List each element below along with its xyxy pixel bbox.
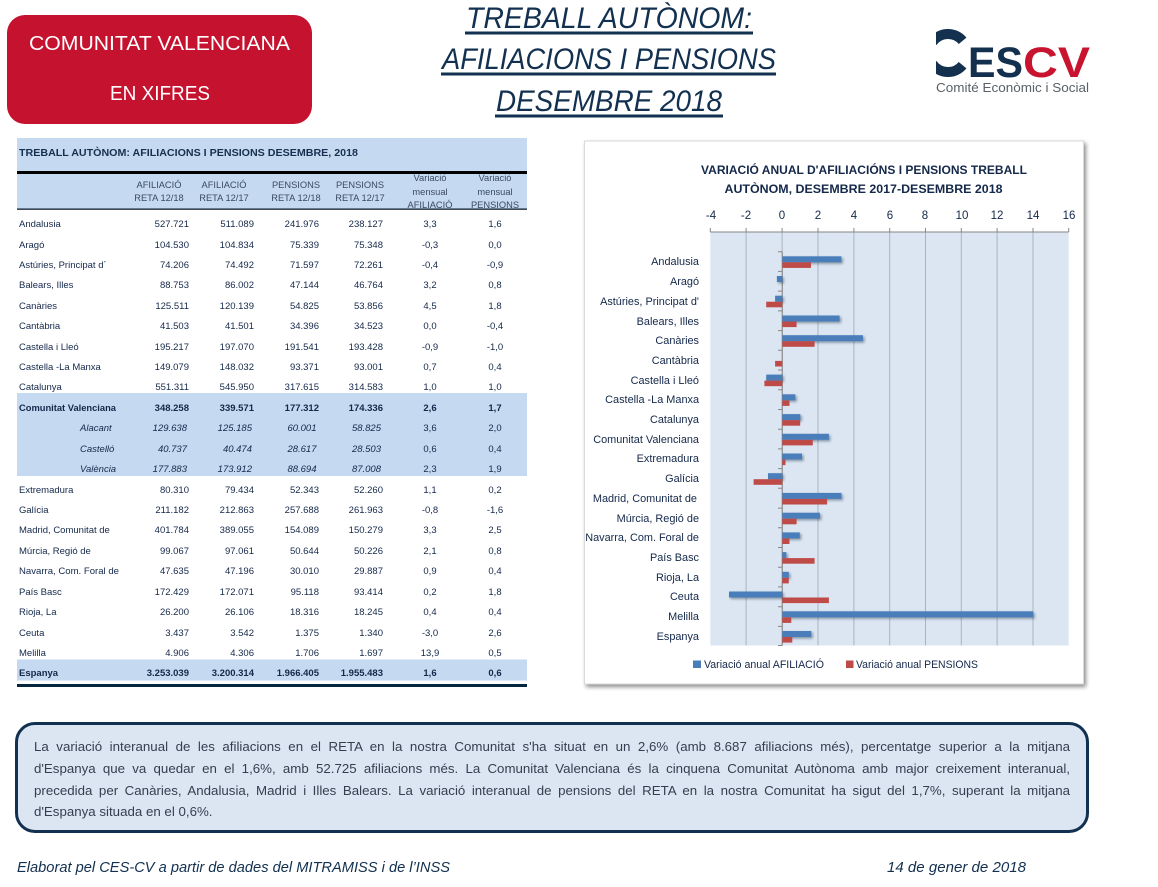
row: Alacant (79, 423, 502, 434)
row: Navarra: 0,9 (423, 566, 437, 577)
row: Balears: 46.764 (354, 280, 383, 291)
row: Ceuta: Ceuta (19, 628, 45, 639)
bars: variació anual afiliació (729, 256, 1033, 637)
row: Alacant: 2,0 (488, 423, 502, 434)
row: Andalusia: 3,3 (423, 219, 437, 230)
category labels: Melilla (668, 611, 700, 623)
row: Aragó: Aragó (19, 240, 44, 251)
row: Castella i Lleó: 197.070 (220, 342, 254, 353)
text box: summary: La variació interanual de les afiliacions en el RETA en la nostra Comunitat s'ha situat en un 2,6% (amb 8.687 afiliacions més), percentatge superior a la mitjana (34, 739, 1070, 754)
row: Melilla: 1.706 (295, 648, 319, 659)
row: Alacant: 129.638 (153, 423, 188, 434)
row: Castella i Lleó: -0,9 (422, 342, 438, 353)
row: Espanya: 1.966.405 (277, 668, 320, 679)
row: Ceuta: -3,0 (422, 628, 438, 639)
row: Múrcia: 0,8 (488, 546, 502, 557)
row: Catalunya: 545.950 (220, 382, 254, 393)
x axis: -4 (706, 210, 717, 222)
row: Espanya: 3.200.314 (212, 668, 255, 679)
row: Melilla: 4.306 (230, 648, 254, 659)
row: Galícia (19, 505, 503, 516)
row: Catalunya: Catalunya (19, 382, 62, 393)
row: Comunitat Valenciana: 177.312 (285, 403, 319, 414)
row: Aragó: 0,0 (488, 240, 502, 251)
row: Castelló (80, 444, 502, 455)
x axis: 16 (1063, 210, 1075, 222)
category labels: Galícia (665, 473, 700, 485)
title (440, 2, 776, 118)
text box: summary (15, 722, 1089, 833)
y axis line and ticks (778, 252, 782, 645)
logo: CES CV: ES (968, 39, 1023, 87)
row: Andalusia: 1,6 (488, 219, 502, 230)
row: Galícia: 261.963 (349, 505, 383, 516)
row: Ceuta: 1.340 (359, 628, 383, 639)
row: Aragó: -0,3 (422, 240, 438, 251)
row: País Basc: 0,2 (423, 587, 437, 598)
row: Castelló: 0,6 (423, 444, 437, 455)
row: Comunitat Valenciana: 174.336 (349, 403, 383, 414)
row: Extremadura: 79.434 (225, 485, 254, 496)
row: Castelló: 0,4 (488, 444, 502, 455)
row: Astúries: -0,9 (487, 260, 503, 271)
row: Espanya: 1.955.483 (341, 668, 383, 679)
row: Rioja: 18.316 (290, 607, 319, 618)
footer: source and date: Elaborat pel CES-CV a partir de dades del MITRAMISS i de l’INSS (17, 859, 450, 876)
x axis: 8 (922, 210, 928, 222)
row: Melilla: 0,5 (488, 648, 502, 659)
row: Astúries: 74.492 (225, 260, 254, 271)
table header: PENSIONS (336, 180, 384, 190)
row: Navarra: 0,4 (488, 566, 502, 577)
row: Múrcia: 99.067 (160, 546, 189, 557)
row: Balears: 0,8 (488, 280, 502, 291)
row: Alacant: 60.001 (287, 423, 316, 434)
row: Melilla: Melilla (19, 648, 47, 659)
row: Castella i Lleó: -1,0 (487, 342, 503, 353)
category labels: Madrid, Comunitat de (593, 493, 697, 505)
row: Castella -La Manxa (19, 362, 502, 373)
text box: summary: d'Espanya que va quedar en el 1,6%, amb 52.725 afiliacions més. La Comunitat Valenciana és la cinquena Comunitat Autònoma amb major creixement interanual, (34, 761, 1070, 776)
data table (17, 138, 527, 687)
row: Rioja: 26.200 (160, 607, 189, 618)
row: Castella -La Manxa: 148.032 (220, 362, 254, 373)
row: Navarra: 47.196 (225, 566, 254, 577)
row: Rioja: 18.245 (354, 607, 383, 618)
row: Canàries: Canàries (19, 301, 57, 312)
row: Alacant: 58.825 (352, 423, 382, 434)
row: Astúries: 72.261 (354, 260, 383, 271)
category labels: Múrcia, Regió de (617, 513, 699, 525)
row: País Basc: 93.414 (354, 587, 383, 598)
row: Canàries: 54.825 (290, 301, 319, 312)
row: Rioja: 0,4 (488, 607, 502, 618)
row: Canàries: 1,8 (488, 301, 502, 312)
table header: RETA 12/18 (271, 193, 321, 203)
row: València: 87.008 (352, 464, 382, 475)
row: Balears: 3,2 (423, 280, 437, 291)
row: País Basc: 95.118 (291, 587, 319, 598)
row: Madrid: 389.055 (220, 525, 254, 536)
table header: AFILIACIÓ (202, 180, 246, 190)
row: València: 173.912 (218, 464, 253, 475)
row: Astúries: 71.597 (290, 260, 319, 271)
x axis: 4 (851, 210, 858, 222)
row: Rioja (19, 607, 502, 618)
chart title: AUTÒNOM, DESEMBRE 2017-DESEMBRE 2018 (724, 181, 1003, 196)
x axis: 14 (1027, 210, 1040, 222)
row: València: València (80, 464, 116, 475)
row: Castella -La Manxa: 0,7 (423, 362, 437, 373)
table header: RETA 12/17 (199, 193, 249, 203)
row: Madrid: 154.089 (285, 525, 319, 536)
row: Canàries (19, 301, 502, 312)
row: Madrid: 150.279 (349, 525, 383, 536)
table header: Variació (414, 173, 446, 183)
table header: RETA 12/17 (335, 193, 385, 203)
row: Castella -La Manxa: 149.079 (155, 362, 189, 373)
row: Astúries (19, 260, 503, 271)
row: País Basc (19, 587, 502, 598)
row: Andalusia: 527.721 (155, 219, 189, 230)
x axis: -2 (741, 210, 751, 222)
row: Extremadura (19, 485, 502, 496)
row: Astúries: -0,4 (422, 260, 438, 271)
badge: Comunitat Valenciana en xifres (7, 15, 312, 124)
row: Catalunya: 314.583 (349, 382, 383, 393)
chart title (701, 162, 1027, 196)
category labels: Cantàbria (652, 355, 700, 367)
logo: CES CV: CV (1023, 39, 1090, 87)
text box: summary: d'Espanya situada en el 0,6%. (34, 804, 212, 819)
row: Navarra: 30.010 (290, 566, 319, 577)
row: Aragó: 75.339 (290, 240, 319, 251)
row: Castella -La Manxa: Castella -La Manxa (19, 362, 102, 373)
row: Castelló: 40.737 (158, 444, 188, 455)
row: Galícia: 257.688 (285, 505, 319, 516)
row: Cantàbria: 41.503 (160, 321, 189, 332)
row: Castella -La Manxa: 93.001 (354, 362, 383, 373)
row: Melilla: 13,9 (421, 648, 439, 659)
category labels: Andalusia (651, 256, 700, 268)
row: Extremadura: 52.260 (354, 485, 383, 496)
category labels (585, 256, 700, 643)
x axis (706, 210, 1075, 232)
row: Aragó: 75.348 (354, 240, 383, 251)
row: Andalusia: 241.976 (285, 219, 319, 230)
x axis: 6 (887, 210, 893, 222)
row: Andalusia: Andalusia (19, 219, 61, 230)
row: Madrid: 401.784 (155, 525, 189, 536)
row: Castelló: 28.503 (351, 444, 382, 455)
row: Catalunya: 551.311 (155, 382, 189, 393)
row: Castella -La Manxa: 0,4 (488, 362, 502, 373)
row: Ceuta: 3.437 (165, 628, 189, 639)
row: Canàries: 53.856 (354, 301, 383, 312)
row: Andalusia (19, 219, 502, 230)
category labels: Catalunya (650, 414, 700, 426)
row: Espanya: 1,6 (423, 668, 437, 679)
row: València: 2,3 (423, 464, 437, 475)
legend: Variació anual PENSIONS (856, 659, 978, 671)
row: Cantàbria: 41.501 (225, 321, 254, 332)
category labels: Ceuta (670, 591, 700, 603)
row: Galícia: Galícia (19, 505, 49, 516)
row: Comunitat Valenciana: Comunitat Valenciana (19, 403, 117, 414)
row: Castella -La Manxa: 93.371 (290, 362, 319, 373)
table header: PENSIONS (272, 180, 320, 190)
table header: Variació (479, 173, 511, 183)
row: Balears: 88.753 (160, 280, 189, 291)
row: Múrcia: 50.226 (354, 546, 383, 557)
x axis: 0 (779, 210, 785, 222)
row: Cantàbria: -0,4 (487, 321, 503, 332)
row: Galícia: 212.863 (220, 505, 254, 516)
row: Navarra: Navarra, Com. Foral de (19, 566, 119, 577)
row: Múrcia: 97.061 (225, 546, 254, 557)
title: TREBALL AUTÒNOM: (466, 2, 752, 35)
row: Castella i Lleó: Castella i Lleó (19, 342, 79, 353)
category labels: Castella i Lleó (631, 375, 699, 387)
row: País Basc: 1,8 (488, 587, 502, 598)
row: Comunitat Valenciana: 348.258 (155, 403, 189, 414)
x axis: 10 (956, 210, 968, 222)
row: Comunitat Valenciana: 1,7 (488, 403, 502, 414)
row: Madrid: 3,3 (423, 525, 437, 536)
badge: Comunitat Valenciana en xifres: EN XIFRES (110, 83, 210, 105)
row: Alacant: 3,6 (423, 423, 437, 434)
table header: mensual (477, 187, 513, 197)
x axis: 2 (815, 210, 821, 222)
category labels: País Basc (650, 552, 700, 564)
row: Espanya: 0,6 (488, 668, 502, 679)
row: València: 88.694 (287, 464, 316, 475)
table header: RETA 12/18 (134, 193, 184, 203)
panel: bar chart (583, 140, 1089, 690)
row: Extremadura: 1,1 (423, 485, 437, 496)
row: Castelló: 40.474 (223, 444, 252, 455)
row: Cantàbria: 34.396 (290, 321, 319, 332)
row: Múrcia: 50.644 (290, 546, 319, 557)
row: Comunitat Valenciana: 2,6 (423, 403, 437, 414)
text box: summary: precedida per Canàries, Andalusia, Madrid i Illes Balears. La variació interanual de pensions del RETA en la nostra Comunitat ha sigut del 1,7%, superant la mitjana (34, 783, 1070, 798)
row: Espanya: Espanya (19, 668, 59, 679)
row: Navarra: 29.887 (354, 566, 383, 577)
category labels: Navarra, Com. Foral de (585, 532, 699, 544)
row: País Basc: País Basc (19, 587, 62, 598)
row: Alacant: 125.185 (218, 423, 253, 434)
row: Melilla (19, 648, 502, 659)
row: València: 177.883 (153, 464, 188, 475)
row: Comunitat Valenciana: 339.571 (220, 403, 255, 414)
table header: PENSIONS (471, 200, 519, 210)
row: Ceuta: 3.542 (230, 628, 254, 639)
row: Catalunya: 317.615 (285, 382, 319, 393)
bars: variació anual pensions (754, 262, 829, 643)
row: Espanya (19, 668, 502, 679)
table header: mensual (412, 187, 448, 197)
row: Múrcia: Múrcia, Regió de (19, 546, 91, 557)
row: Canàries: 125.511 (155, 301, 189, 312)
row: País Basc: 172.429 (155, 587, 189, 598)
category labels: Espanya (657, 631, 700, 643)
row: Balears: Balears, Illes (19, 280, 74, 291)
row: Madrid: 2,5 (488, 525, 502, 536)
row: País Basc: 172.071 (220, 587, 254, 598)
category labels: Balears, Illes (637, 316, 700, 328)
category labels: Aragó (670, 276, 699, 288)
badge: Comunitat Valenciana en xifres: COMUNITAT VALENCIANA (29, 33, 291, 55)
row: Cantàbria: 34.523 (354, 321, 383, 332)
row: Rioja: 26.106 (225, 607, 254, 618)
row: Madrid (19, 525, 502, 536)
row: Balears: 47.144 (290, 280, 319, 291)
row: Castella i Lleó: 193.428 (349, 342, 383, 353)
row: Extremadura: 80.310 (160, 485, 189, 496)
row: Navarra: 47.635 (160, 566, 189, 577)
legend (693, 658, 978, 671)
row: Catalunya: 1,0 (423, 382, 437, 393)
chart title: VARIACIÓ ANUAL D'AFILIACIÓNS I PENSIONS TREBALL (701, 162, 1027, 177)
legend: Variació anual AFILIACIÓ (704, 658, 824, 671)
row: Ceuta (19, 628, 502, 639)
row: Castella i Lleó: 195.217 (155, 342, 189, 353)
title: DESEMBRE 2018 (496, 85, 722, 118)
row: València (80, 464, 502, 475)
category labels: Comunitat Valenciana (593, 434, 700, 446)
category labels: Castella -La Manxa (605, 394, 700, 406)
row: Catalunya (19, 382, 502, 393)
table header: AFILIACIÓ (137, 180, 181, 190)
row: Astúries: Astúries, Principat d´ (19, 260, 107, 271)
row: Galícia: 211.182 (155, 505, 189, 516)
row: Ceuta: 2,6 (488, 628, 502, 639)
row: Andalusia: 238.127 (349, 219, 383, 230)
row: Ceuta: 1.375 (295, 628, 319, 639)
row: Melilla: 4.906 (165, 648, 189, 659)
row: Castella i Lleó (19, 342, 503, 353)
row: Canàries: 4,5 (423, 301, 437, 312)
row: Madrid: Madrid, Comunitat de (19, 525, 110, 536)
row: Rioja: 0,4 (423, 607, 437, 618)
category labels: Rioja, La (656, 572, 700, 584)
row: Cantàbria: Cantàbria (19, 321, 61, 332)
row: Canàries: 120.139 (220, 301, 254, 312)
row: Navarra (19, 566, 502, 577)
row: Múrcia: 2,1 (423, 546, 437, 557)
category labels: Extremadura (637, 453, 700, 465)
row: Extremadura: Extremadura (19, 485, 74, 496)
row: Cantàbria: 0,0 (423, 321, 437, 332)
row: Andalusia: 511.089 (220, 219, 254, 230)
table header: AFILIACIÓ (408, 200, 452, 210)
row: Astúries: 74.206 (160, 260, 189, 271)
row: Aragó: 104.530 (155, 240, 189, 251)
row: Castelló: 28.617 (286, 444, 317, 455)
row: Múrcia (19, 546, 502, 557)
row: Melilla: 1.697 (359, 648, 383, 659)
row: Comunitat Valenciana (19, 403, 502, 414)
row: Galícia: -1,6 (487, 505, 503, 516)
row: Espanya: 3.253.039 (147, 668, 189, 679)
row: Rioja: Rioja, La (19, 607, 57, 618)
logo: CES CV (936, 29, 1090, 95)
row: València: 1,9 (488, 464, 502, 475)
row: Aragó (19, 240, 502, 251)
footer: source and date (17, 859, 1027, 876)
footer: source and date: 14 de gener de 2018 (887, 859, 1027, 876)
row: Castella i Lleó: 191.541 (285, 342, 319, 353)
row: Extremadura: 0,2 (488, 485, 502, 496)
table title: TREBALL AUTÒNOM: AFILIACIONS I PENSIONS DESEMBRE, 2018 (19, 146, 358, 159)
category labels: Astúries, Principat d' (600, 296, 699, 308)
plot area (710, 232, 1069, 646)
table header (134, 173, 519, 210)
x axis: 12 (991, 210, 1003, 222)
row: Balears (19, 280, 502, 291)
row: Aragó: 104.834 (220, 240, 254, 251)
row: Catalunya: 1,0 (488, 382, 502, 393)
row: Extremadura: 52.343 (290, 485, 319, 496)
row: Balears: 86.002 (225, 280, 254, 291)
row: Cantàbria (19, 321, 503, 332)
category labels: Canàries (655, 335, 700, 347)
row: Galícia: -0,8 (422, 505, 438, 516)
logo: CES CV: Comité Econòmic i Social (936, 81, 1089, 95)
row: Alacant: Alacant (79, 423, 112, 434)
row: Castelló: Castelló (80, 444, 115, 455)
